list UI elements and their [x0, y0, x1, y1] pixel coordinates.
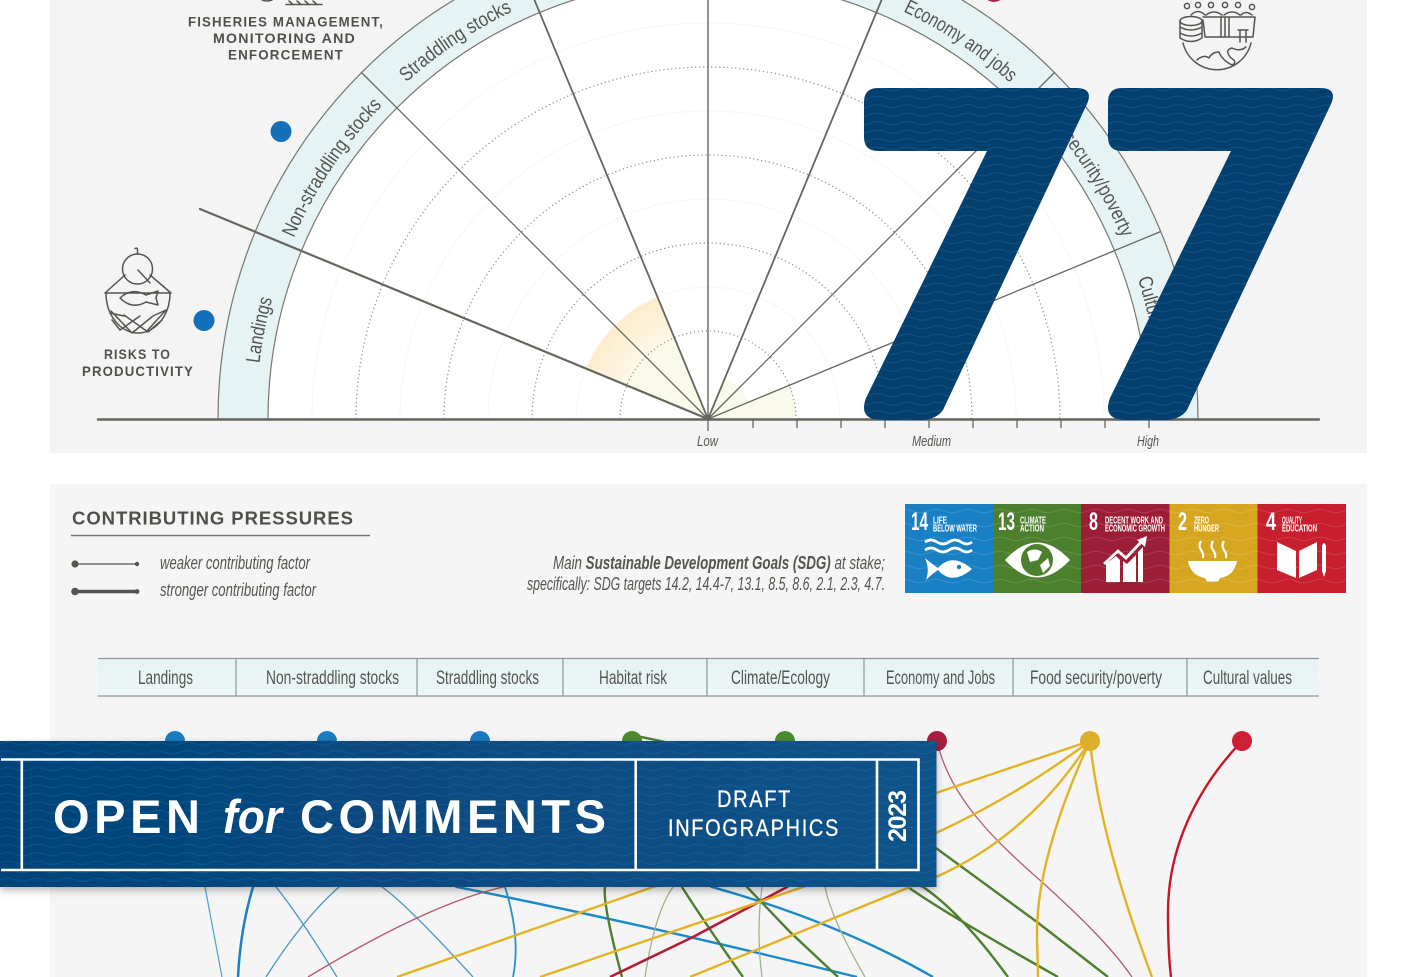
SDG 8 tile: 8	[1089, 508, 1098, 536]
SDG 13 tile: ACTION	[1020, 524, 1044, 534]
icon: fisheries management (cropped boat)	[262, 0, 322, 4]
risk sectors	[586, 297, 796, 419]
SDG 8 tile: DECENT WORK AND	[1105, 516, 1163, 526]
table header: pressure categories: Landings	[138, 668, 193, 689]
baseline axis	[98, 418, 1319, 421]
SDG 14 tile	[905, 504, 994, 593]
heading: fisheries management: ENFORCEMENT	[228, 46, 344, 62]
banner year: 2023	[884, 790, 912, 842]
heading: risks to productivity: PRODUCTIVITY	[82, 363, 194, 379]
table header: pressure categories: Economy and Jobs	[886, 668, 995, 689]
text block: SDG note	[527, 553, 885, 594]
band labels: Non-straddling stocks	[282, 100, 381, 237]
legend: stronger label: stronger contributing factor	[160, 580, 317, 600]
table header: pressure categories: Cultural values	[1203, 668, 1292, 689]
band labels	[246, 0, 1158, 362]
banner subtitle: DRAFT	[717, 786, 792, 813]
yellow links	[397, 741, 1152, 977]
axis ticks	[708, 419, 1149, 431]
SDG 2 tile	[1170, 504, 1258, 593]
banner title: COMMENTS	[300, 790, 606, 843]
table header: pressure categories: Non-straddling stocks	[266, 668, 399, 689]
SDG 13 tile: 13	[998, 508, 1015, 536]
SDG 4 tile	[1258, 504, 1346, 593]
panel: top polar chart background	[50, 0, 1367, 453]
legend: weaker line	[71, 560, 139, 568]
table header: pressure categories: Habitat risk	[599, 668, 667, 689]
SDG 13 tile	[994, 504, 1082, 593]
banner title: for	[223, 790, 285, 843]
heading: science (hidden behind numeral): SCIENCE AND	[1166, 85, 1268, 101]
inner white semicircle	[268, 0, 1148, 419]
banner subtitle	[668, 786, 840, 842]
icon: science and knowledge globe	[1180, 2, 1255, 70]
marker: non-straddling dot	[270, 121, 292, 142]
green links	[605, 735, 1108, 977]
SDG 14 tile: BELOW WATER	[933, 524, 977, 534]
nodes	[165, 731, 1252, 751]
banner title: OPEN	[53, 790, 200, 843]
text block: SDG note: Main Sustainable Development Goals (SDG) at stake;	[553, 553, 885, 573]
marker: landings dot	[194, 310, 214, 331]
band labels: Cultural values	[1139, 276, 1158, 318]
axis label: high: High	[1137, 433, 1159, 450]
band ring	[218, 0, 1198, 419]
legend	[71, 536, 370, 600]
band labels: Landings	[246, 297, 274, 362]
dotted level rings	[312, 23, 1104, 419]
table header: pressure categories: Food security/poverty	[1030, 668, 1162, 689]
banner subtitle: INFOGRAPHICS	[668, 815, 840, 842]
SDG tiles	[905, 504, 1346, 593]
SDG 14 tile: LIFE	[933, 516, 947, 526]
legend: stronger line	[71, 588, 139, 595]
banner frame	[1, 760, 918, 870]
axis label: low: Low	[697, 433, 719, 450]
heading: risks to productivity: RISKS TO	[104, 346, 171, 362]
SDG 4 tile: QUALITY	[1282, 516, 1302, 526]
table header: pressure categories	[98, 658, 1319, 696]
text block: SDG note: specifically: SDG targets 14.2, 14.4-7, 13.1, 8.5, 8.6, 2.1, 2.3, 4.7.	[527, 574, 885, 594]
heading: risks to productivity	[82, 346, 194, 379]
SDG 14 tile: 14	[911, 508, 928, 536]
network of pressure links	[165, 731, 1252, 977]
panel: contributing pressures background	[50, 484, 1367, 977]
SDG 2 tile: 2	[1178, 508, 1187, 536]
SDG 4 tile: EDUCATION	[1282, 524, 1317, 534]
SDG 4 tile: 4	[1266, 508, 1276, 536]
heading: fisheries management: FISHERIES MANAGEMENT,	[188, 14, 384, 30]
axis label: medium: Medium	[912, 433, 951, 450]
polar chart	[96, 0, 1320, 450]
banner: open for comments	[0, 741, 936, 887]
icon: basket with fish and clock	[105, 248, 171, 333]
table header: pressure categories: Straddling stocks	[436, 668, 539, 689]
SDG 2 tile: HUNGER	[1194, 524, 1219, 534]
spokes	[200, 0, 1161, 419]
SDG 13 tile: CLIMATE	[1020, 516, 1046, 526]
band labels: Food security/poverty	[1069, 134, 1132, 235]
heading: fisheries management	[188, 14, 384, 62]
heading: contributing pressures: CONTRIBUTING PRESSURES	[72, 508, 353, 528]
SDG 8 tile: ECONOMIC GROWTH	[1105, 524, 1165, 534]
large page number 77	[864, 88, 1333, 420]
heading: fisheries management: MONITORING AND	[213, 30, 356, 46]
SDG 2 tile: ZERO	[1194, 516, 1209, 526]
banner title	[53, 790, 606, 843]
SDG 8 tile	[1081, 504, 1170, 593]
table header: pressure categories: Climate/Ecology	[731, 668, 830, 689]
marker: economy dot	[983, 0, 1005, 2]
legend: weaker label: weaker contributing factor	[160, 553, 311, 573]
blue links	[175, 741, 933, 977]
pink and red links	[308, 741, 1242, 977]
